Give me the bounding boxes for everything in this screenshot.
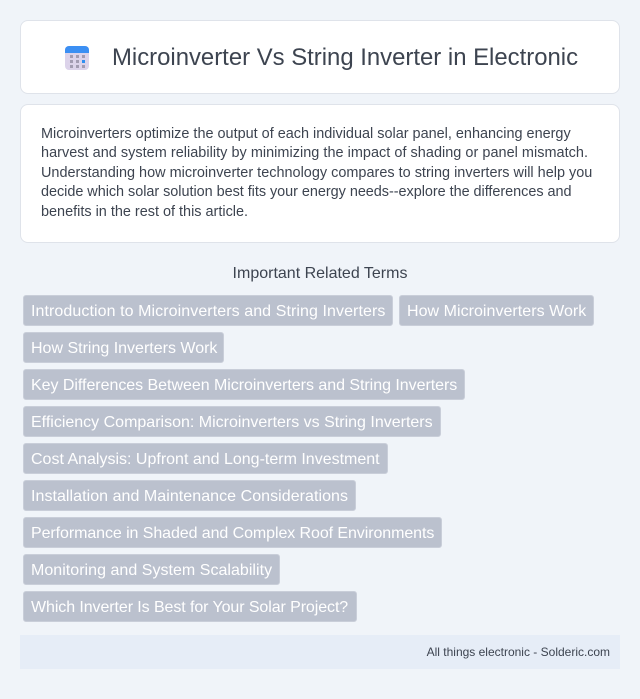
tag: Installation and Maintenance Considerations [31,488,348,505]
tag [23,406,441,437]
intro text: benefits in the rest of this article. [41,204,248,220]
tag list [23,295,594,622]
intro text: decide which solar solution best fits your energy needs--explore the differences and [41,184,572,200]
tag [399,295,594,326]
tag [23,295,393,326]
title: Microinverter Vs String Inverter in Electronic [112,44,578,71]
intro text: Microinverters optimize the output of each individual solar panel, enhancing energy [41,126,571,142]
section heading: Important Related Terms [233,265,407,282]
intro text [41,126,592,220]
tag [23,443,388,474]
tag [23,554,280,585]
intro text: Understanding how microinverter technology compares to string inverters will help you [41,165,592,181]
header card [20,20,620,94]
tag: Efficiency Comparison: Microinverters vs String Inverters [31,414,433,431]
tag: Introduction to Microinverters and String Inverters [31,303,385,320]
tag [23,591,357,622]
intro text: harvest and system reliability by minimizing the impact of shading or panel mismatch. [41,145,588,161]
tag: Monitoring and System Scalability [31,562,272,579]
tag [23,332,224,363]
intro card [20,104,620,243]
tag: Which Inverter Is Best for Your Solar Project? [31,599,348,616]
tag: How String Inverters Work [31,340,217,357]
footer [20,635,620,669]
tag [23,517,442,548]
tag [23,369,465,400]
tag: How Microinverters Work [407,303,586,320]
footer text: All things electronic - Solderic.com [427,645,610,659]
tag: Performance in Shaded and Complex Roof Environments [31,525,434,542]
icon: calendar grid [65,46,89,70]
tag [23,480,356,511]
tag: Key Differences Between Microinverters and String Inverters [31,377,457,394]
tag: Cost Analysis: Upfront and Long-term Investment [31,451,380,468]
